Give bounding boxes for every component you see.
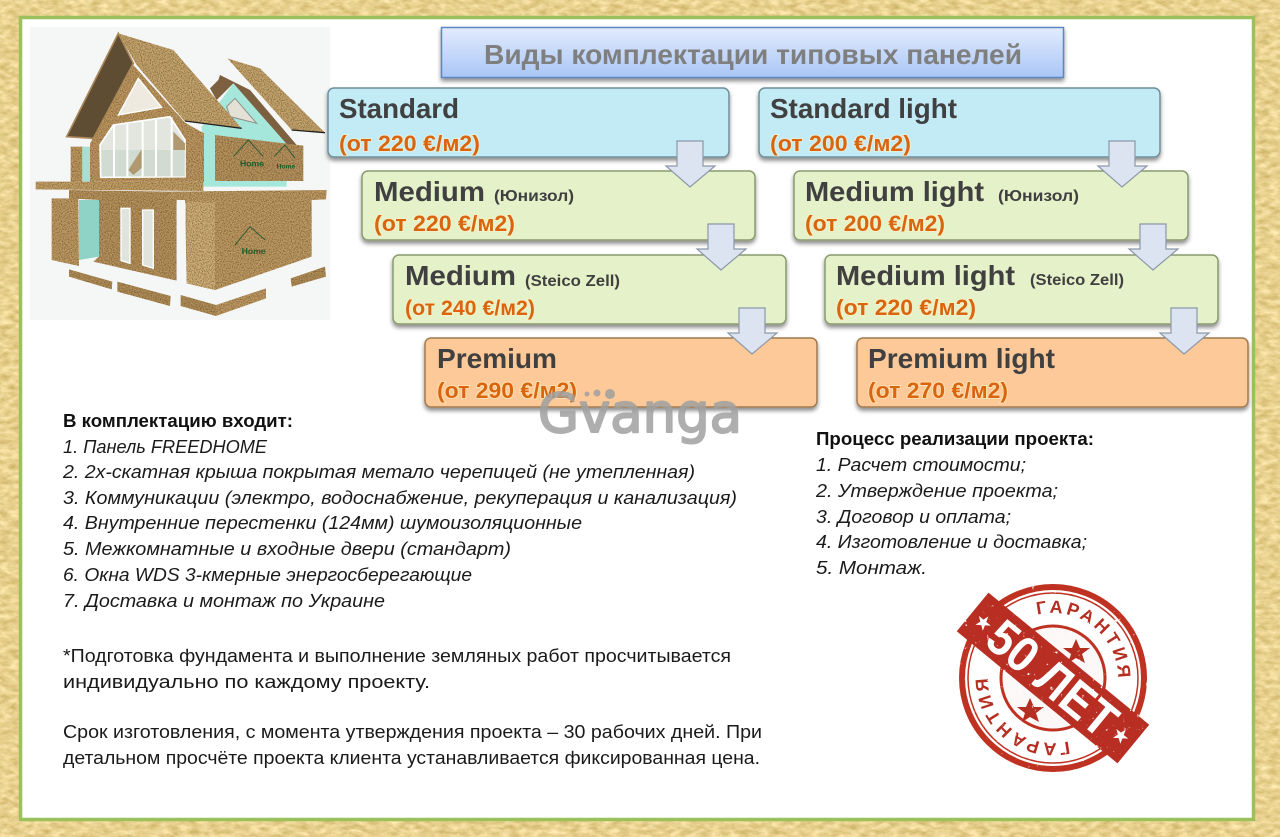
panel: Medium Steico Zell <box>393 255 786 324</box>
panel: Medium Steico Zell: (от 240 €/м2) <box>405 297 535 320</box>
illustration: exploded panel house: Home <box>277 163 295 170</box>
arrow: Medium light Steico to Premium light <box>1160 308 1209 354</box>
panel: Premium <box>425 338 817 407</box>
panel: Standard light: Standard light <box>770 93 957 124</box>
panel: Medium light Steico Zell: (от 220 €/м2) <box>836 295 976 320</box>
panel: Standard: Standard <box>339 93 459 124</box>
arrow: Medium to Medium Steico <box>697 224 746 270</box>
text block: foundation note <box>63 645 731 692</box>
panel: Premium light: (от 270 €/м2) <box>868 378 1008 403</box>
arrow: Medium light to Medium light Steico <box>1129 224 1178 270</box>
stamp: 50 year guarantee: ★ <box>1107 722 1134 750</box>
panel: Medium light Steico Zell: Medium light <box>836 260 1015 291</box>
panel: Medium Steico Zell: Medium <box>405 260 516 291</box>
text block: project process: 4. Изготовление и доставка; <box>816 531 1087 552</box>
text block: package contents: 5. Межкомнатные и входные двери (стандарт) <box>63 538 511 559</box>
title banner: Виды комплектации типовых панелей <box>484 39 1022 70</box>
text block: foundation note: *Подготовка фундамента и выполнение земляных работ просчитывается <box>63 645 731 666</box>
text block: foundation note: индивидуально по каждому проекту. <box>63 671 430 692</box>
panel: Medium light Юнизол <box>794 171 1188 240</box>
text block: production term: детальном просчёте проекта клиента устанавливается фиксированная цена. <box>63 747 760 768</box>
panel: Premium light: Premium light <box>868 343 1055 374</box>
text block: package contents: 6. Окна WDS 3-кмерные энергосберегающие <box>63 564 472 585</box>
text block: production term: Срок изготовления, с момента утверждения проекта – 30 рабочих дней. При <box>63 721 762 742</box>
arrow: Medium Steico to Premium <box>728 308 777 354</box>
stamp: 50 year guarantee <box>956 584 1150 772</box>
panel: Standard light <box>759 88 1160 157</box>
stamp: 50 year guarantee: 50 ЛЕТ <box>976 609 1129 749</box>
text block: package contents: 4. Внутренние перестенки (124мм) шумоизоляционные <box>63 512 582 533</box>
illustration: exploded panel house: Home <box>242 246 266 256</box>
text block: project process <box>815 429 1094 578</box>
arrow: Standard to Medium <box>666 141 715 187</box>
panel: Standard <box>328 88 729 157</box>
text block: project process: 2. Утверждение проекта; <box>815 480 1058 501</box>
text block: project process: Процесс реализации проекта: <box>816 429 1094 449</box>
text block: production term <box>63 721 762 768</box>
panel: Medium Юнизол: (от 220 €/м2) <box>374 211 515 236</box>
text block: package contents: 3. Коммуникации (электро, водоснабжение, рекуперация и канализация) <box>63 487 737 508</box>
illustration: exploded panel house <box>30 27 330 320</box>
panel: Standard light: (от 200 €/м2) <box>770 131 911 156</box>
title banner <box>442 28 1064 78</box>
panel: Medium Steico Zell: (Steico Zell) <box>525 273 620 290</box>
panel: Premium: Premium <box>437 343 557 374</box>
panel: Premium light <box>857 338 1248 407</box>
panel: Standard: (от 220 €/м2) <box>339 131 480 156</box>
panel: Medium Юнизол: (Юнизол) <box>494 188 574 205</box>
text block: package contents: 7. Доставка и монтаж по Украине <box>63 590 385 611</box>
text block: package contents: 1. Панель FREEDHOME <box>63 436 268 457</box>
text block: project process: 5. Монтаж. <box>816 557 927 578</box>
text block: project process: 3. Договор и оплата; <box>816 506 1011 527</box>
watermark: Gvanga: Gvanga <box>538 382 742 445</box>
text block: package contents: 2. 2х-скатная крыша покрытая метало черепицей (не утепленная) <box>62 461 695 482</box>
stamp: 50 year guarantee: ★ <box>969 609 997 637</box>
illustration: exploded panel house: Home <box>240 159 264 169</box>
stamp: 50 year guarantee: ГАРАНТИЯ <box>976 679 1070 756</box>
panel: Premium: (от 290 €/м2) <box>437 378 577 403</box>
panel: Medium light Steico Zell: (Steico Zell) <box>1030 272 1124 289</box>
panel: Medium light Юнизол: Medium light <box>805 176 984 207</box>
text block: package contents: В комплектацию входит: <box>63 411 293 431</box>
stamp: 50 year guarantee: ГАРАНТИЯ <box>1036 600 1130 677</box>
panel: Medium Юнизол: Medium <box>374 176 485 207</box>
panel: Medium light Юнизол: (Юнизол) <box>998 188 1079 205</box>
panel: Medium light Steico Zell <box>825 255 1218 324</box>
text block: package contents <box>62 411 737 611</box>
text block: project process: 1. Расчет стоимости; <box>816 454 1026 475</box>
panel: Medium Юнизол <box>362 171 755 240</box>
arrow: Standard light to Medium light <box>1098 141 1147 187</box>
panel: Medium light Юнизол: (от 200 €/м2) <box>805 211 945 236</box>
